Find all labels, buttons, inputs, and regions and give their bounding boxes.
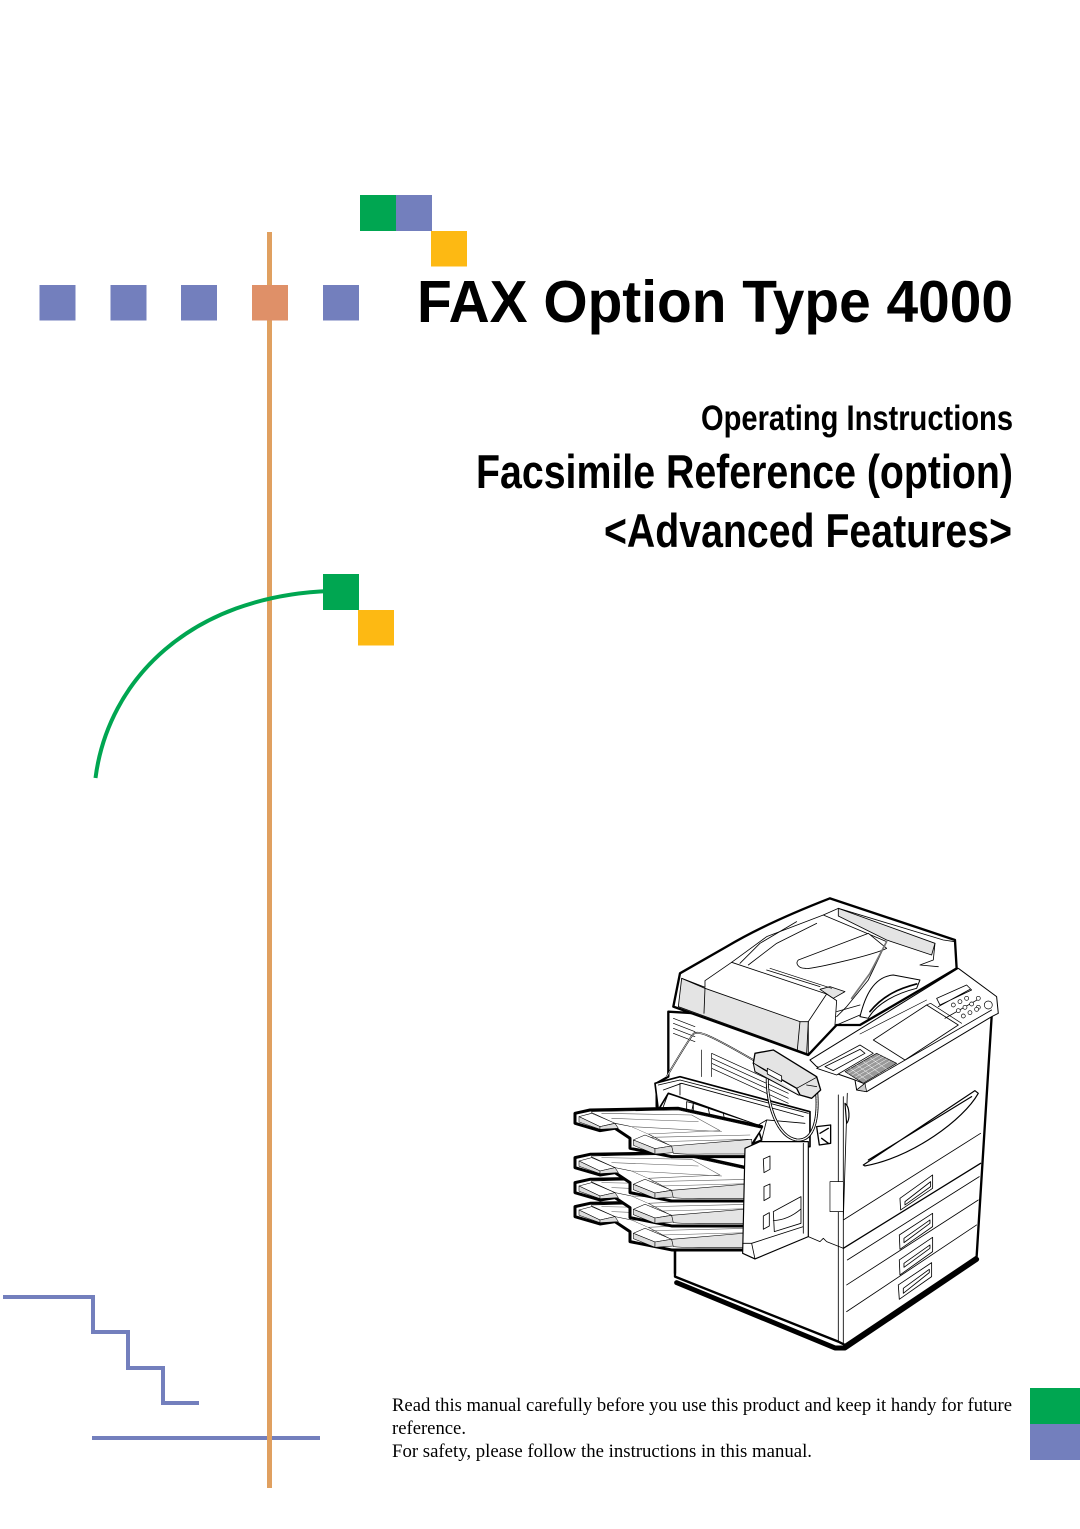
output tray 4 [575, 1202, 762, 1250]
body seams [808, 1093, 981, 1345]
feeder tray lid [732, 915, 887, 1017]
safety notice: Read this manual carefully before you use this product and keep it handy for future [392, 1396, 1012, 1416]
finisher windows and label [763, 1156, 801, 1232]
vertical orange line [267, 232, 272, 1488]
orange line crossing [267, 1436, 272, 1440]
bottom left body edge [671, 1252, 678, 1273]
blue staircase line [3, 1297, 199, 1403]
small display [817, 1045, 873, 1075]
phone cable [667, 1033, 753, 1077]
illustration: copier with fax handset [575, 898, 998, 1348]
safety notice: For safety, please follow the instructions in this manual. [392, 1442, 812, 1462]
touch screen [873, 1005, 958, 1060]
output tray 2 [575, 1153, 762, 1201]
rear vents [673, 1018, 788, 1103]
main body [657, 968, 992, 1345]
feeder hinge tab [820, 987, 845, 998]
panel surface [810, 968, 998, 1092]
safety notice: reference. [392, 1419, 466, 1439]
keypad grille [845, 1053, 897, 1083]
drawer handles [898, 1175, 933, 1299]
keys [937, 985, 980, 1018]
handset body [753, 1050, 821, 1098]
bottom right squares [1030, 1388, 1080, 1460]
finisher opening details [687, 1102, 758, 1133]
feeder outer shell [673, 898, 957, 1055]
output tray 1 [575, 1108, 762, 1157]
finisher front panel [743, 1142, 808, 1259]
finisher and trays, traced in close-up coordinates [575, 1077, 810, 1273]
row of squares [40, 285, 359, 320]
front paper slot [863, 1091, 978, 1166]
middle square cluster [323, 574, 394, 646]
handset with coiled cord [753, 1050, 821, 1140]
exit tray [860, 975, 920, 1018]
finisher hood [655, 1077, 810, 1147]
side details [830, 1182, 843, 1212]
horizontal blue line [92, 1436, 320, 1440]
feeder front face, grey [678, 978, 808, 1054]
safety notice [392, 1396, 1012, 1462]
title: FAX Option Type 4000 [417, 268, 1013, 335]
control panel and document feeder, traced in close-up coordinates [667, 898, 998, 1103]
coiled cord [767, 1077, 817, 1140]
feeder paper guide slot [797, 933, 887, 968]
base shadow [677, 1259, 977, 1348]
output tray 3 [575, 1178, 762, 1226]
top square cluster [360, 195, 467, 266]
rear grey slot [838, 908, 935, 955]
green arc [96, 591, 330, 778]
subtitle: operating instructions: Operating Instructions [701, 398, 1013, 438]
